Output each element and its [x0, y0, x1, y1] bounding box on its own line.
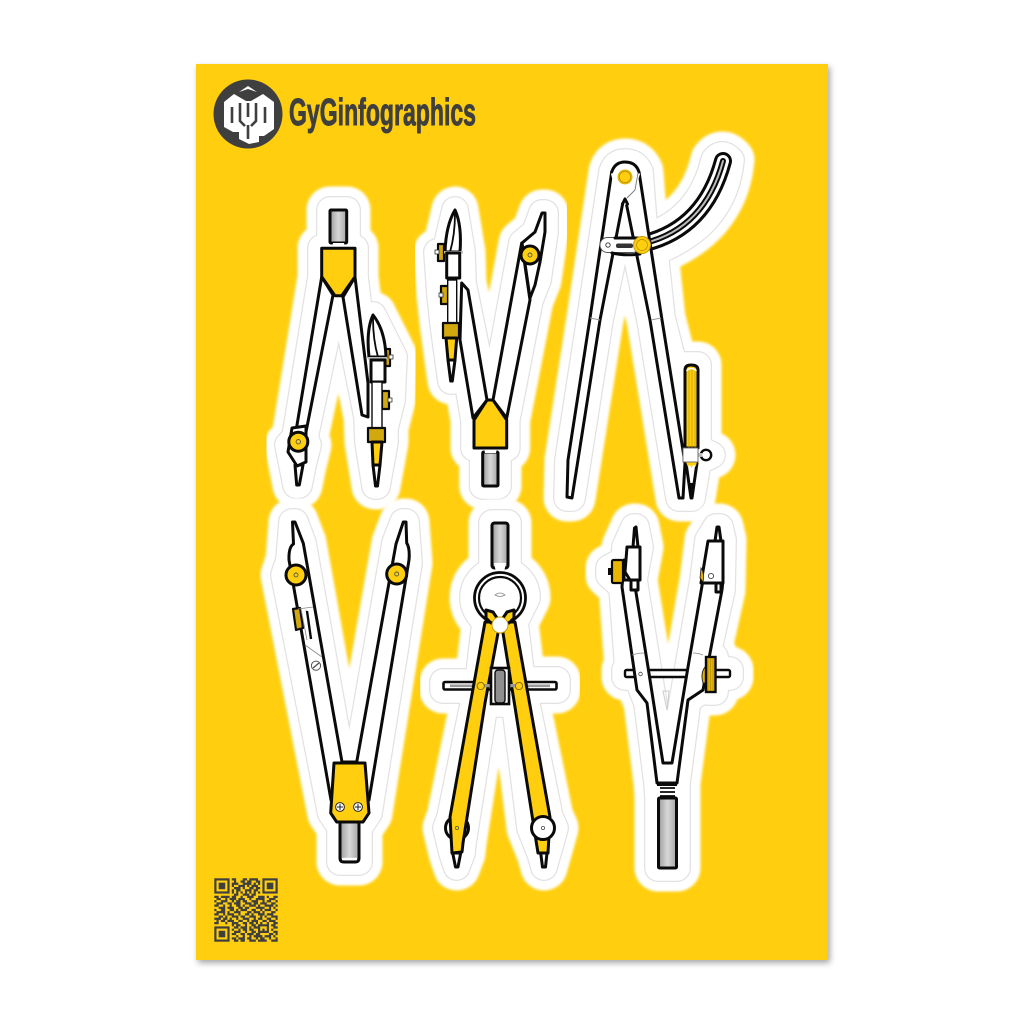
- handle: [483, 452, 498, 486]
- pivot circle: [492, 617, 508, 633]
- left wheel: [286, 565, 306, 585]
- right clamp and tip: [521, 213, 545, 298]
- left cap and tip: [608, 527, 640, 590]
- right leg: [626, 172, 685, 498]
- pencil holder: [368, 315, 393, 486]
- left leg: [567, 172, 623, 498]
- ring spring: [474, 572, 526, 624]
- adjuster knob: [491, 668, 509, 704]
- left leg: [460, 283, 487, 418]
- ribbed collar: [657, 783, 677, 796]
- sticker: wing compass with pencil, top right: [567, 155, 731, 498]
- right leg: [503, 622, 550, 853]
- right wheel: [387, 564, 407, 584]
- left tip: [453, 826, 461, 867]
- inner gap detail: [663, 691, 669, 710]
- sticker: compass with block head, bottom left: [284, 522, 409, 862]
- logo: GyGinfographics: [214, 80, 476, 148]
- left clamp and tip: [288, 426, 308, 485]
- right cap and tip: [700, 527, 723, 592]
- sticker: compass with pencil holder, top left: [288, 210, 394, 486]
- central rod over legs: [478, 684, 522, 687]
- hinge hole: [639, 672, 642, 676]
- QR data modules: [214, 879, 278, 941]
- left leg: [295, 277, 333, 437]
- panel: yellow sticker sheet: [196, 64, 828, 960]
- crossbar: [625, 670, 730, 677]
- right leg: [357, 522, 409, 800]
- sticker halo: [284, 522, 409, 862]
- sticker halo: [609, 527, 730, 868]
- handle: [340, 822, 359, 862]
- logo wordmark: GyGinfographics: [289, 92, 476, 134]
- icon: logo badge: [214, 80, 282, 148]
- sticker halo: [443, 523, 557, 867]
- handle: [492, 523, 508, 568]
- pencil holder: [435, 210, 463, 381]
- sticker halo: [567, 155, 731, 498]
- handle: [330, 210, 347, 243]
- locking bar: [600, 236, 650, 255]
- sticker: compass inverted, top middle: [435, 210, 545, 486]
- pencil: [683, 365, 711, 498]
- threaded rod: [444, 682, 556, 690]
- sticker halo: [288, 210, 394, 486]
- right foot: [532, 816, 554, 867]
- block screws: [336, 803, 362, 811]
- left foot circle: [446, 816, 468, 840]
- knee marks: [590, 318, 661, 320]
- rod pins: [477, 682, 523, 690]
- hinge screw: [617, 169, 633, 185]
- QR code: [214, 879, 278, 941]
- handle: [658, 798, 676, 868]
- right leg: [343, 277, 368, 417]
- left leg: [450, 622, 498, 853]
- sticker: spring compass with knurled wheel, bottom right: [608, 527, 730, 868]
- right leg: [493, 243, 530, 418]
- hinge cap: [611, 162, 640, 205]
- left leg: [289, 522, 342, 800]
- base block: [474, 400, 507, 448]
- head block: [331, 763, 369, 822]
- sticker halo: [437, 210, 545, 486]
- spring body: [622, 560, 723, 783]
- sticker: yellow bow compass, bottom middle: [443, 523, 557, 867]
- curved arm: [645, 161, 723, 243]
- leg top tabs: [486, 610, 514, 623]
- side adjuster: [293, 607, 322, 670]
- knurled wheel: [702, 657, 716, 692]
- head block: [322, 248, 355, 296]
- QR finder patterns: [215, 879, 277, 941]
